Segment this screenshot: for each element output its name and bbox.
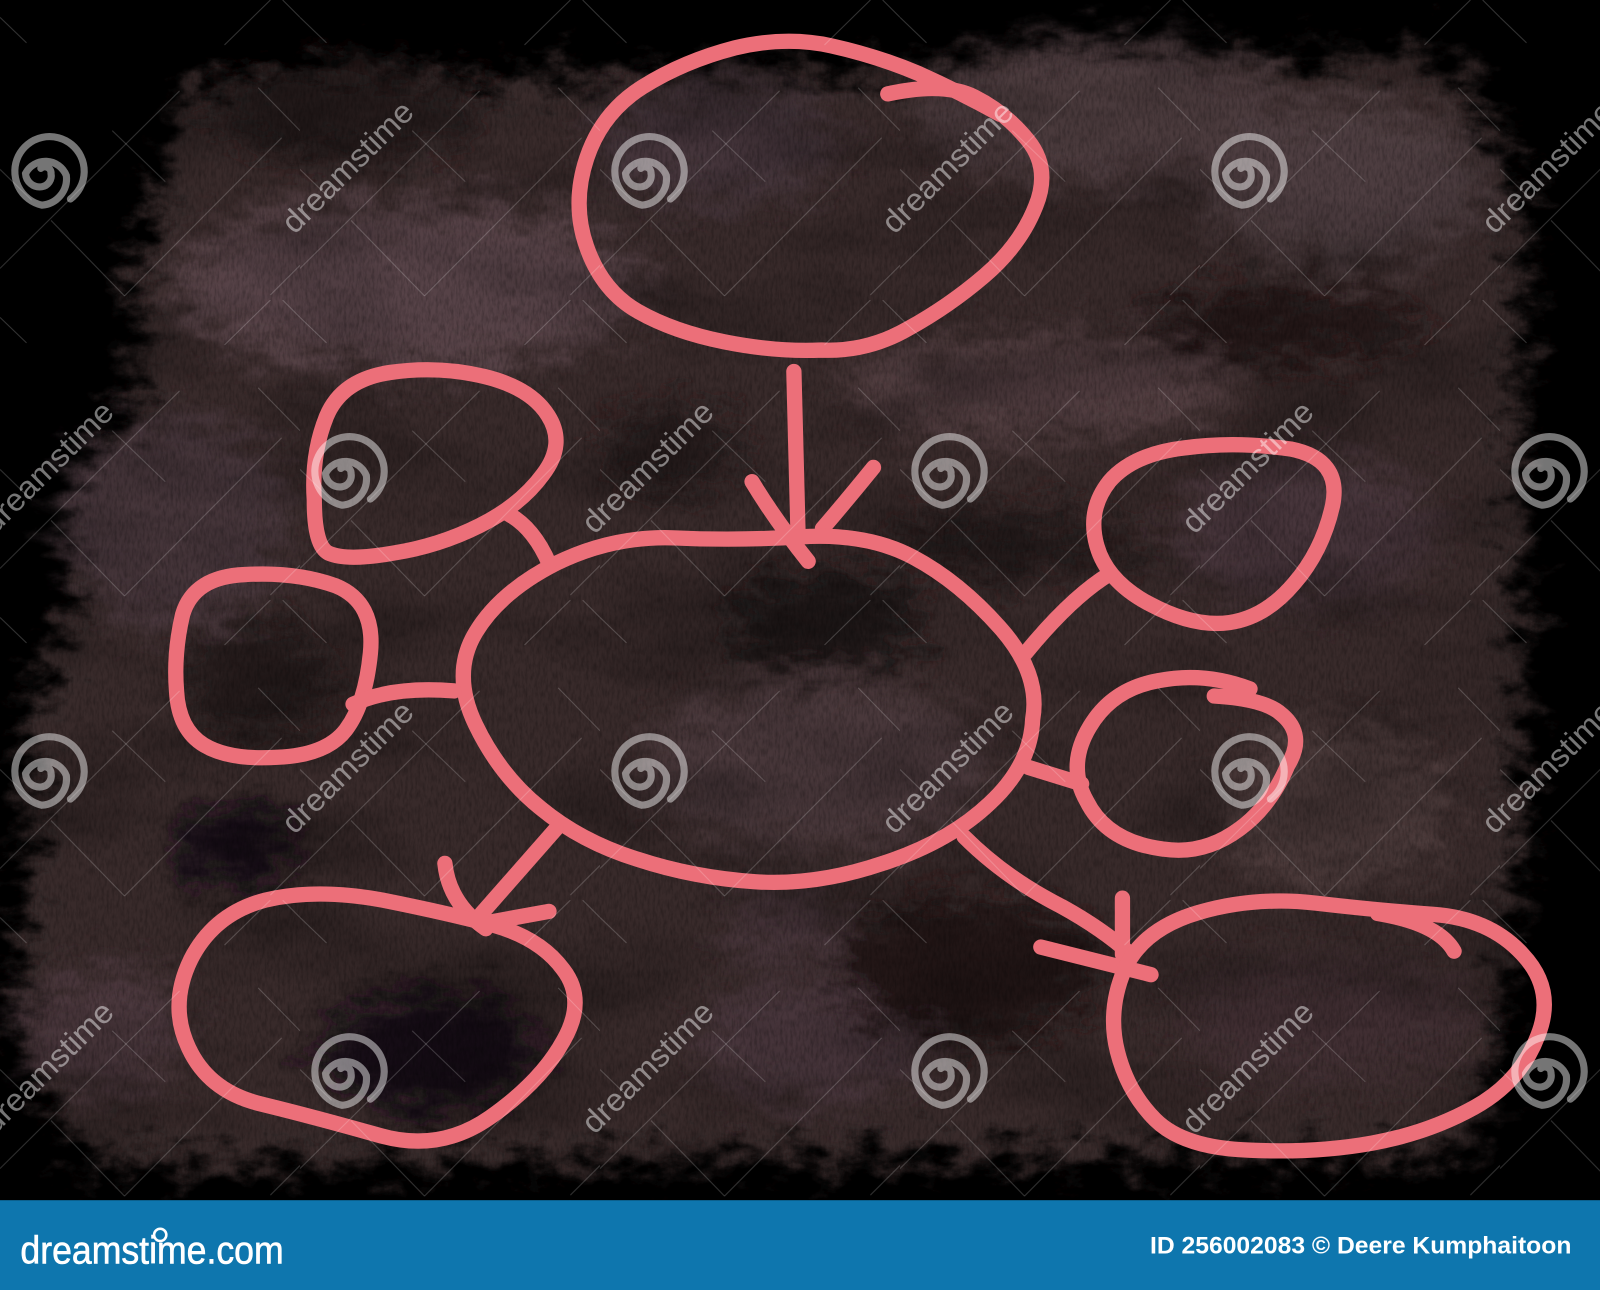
connector: upper right blob [1026,574,1110,653]
arrow: top oval to centre [752,371,873,561]
footer bar [0,1200,1600,1290]
arrow: centre to bottom right [964,837,1151,975]
upper left blob [314,370,556,557]
centre oval [463,536,1034,882]
lower right blob [1077,678,1296,850]
mind map diagram [176,41,1544,1151]
image credit: ID 256002083 © Deere Kumphaitoon [1150,1232,1571,1259]
watermark overlay: dreamstime [574,393,721,540]
footer logo: dreamstime.com [20,1229,284,1272]
connector: left blob [353,690,454,704]
bottom right blob [1114,901,1544,1151]
watermark overlay: dreamstime [1174,393,1321,540]
connector: lower right blob [1029,767,1082,784]
watermark overlay: dreamstime [874,693,1021,840]
footer logo spiral [154,1229,166,1241]
watermark overlay: dreamstime [274,693,421,840]
watermark overlay: dreamstime [1174,994,1321,1140]
top oval [579,41,1042,350]
upper right blob [1094,445,1334,623]
watermark overlay: dreamstime [574,994,721,1140]
connector: upper left blob [505,512,549,563]
left blob [176,574,371,758]
watermark overlay: dreamstime [274,93,421,240]
watermark overlay: dreamstime [874,93,1021,240]
arrow: centre to bottom left [445,829,556,929]
bottom left blob [179,894,575,1141]
